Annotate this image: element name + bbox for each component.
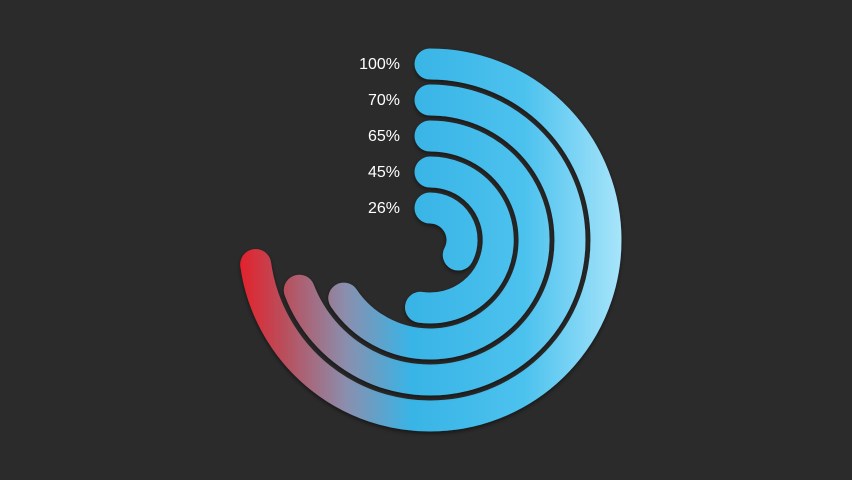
ring: 26%: [430, 208, 462, 255]
labels: 65%: [368, 128, 400, 145]
labels: [359, 56, 400, 217]
ring: 65%: [344, 136, 534, 344]
ring: 70%: [299, 100, 570, 380]
ring: 45%: [420, 172, 498, 308]
labels: 26%: [368, 200, 400, 217]
labels: 100%: [359, 56, 400, 73]
labels: 45%: [368, 164, 400, 181]
ring: 100%: [256, 64, 606, 416]
labels: 70%: [368, 92, 400, 109]
